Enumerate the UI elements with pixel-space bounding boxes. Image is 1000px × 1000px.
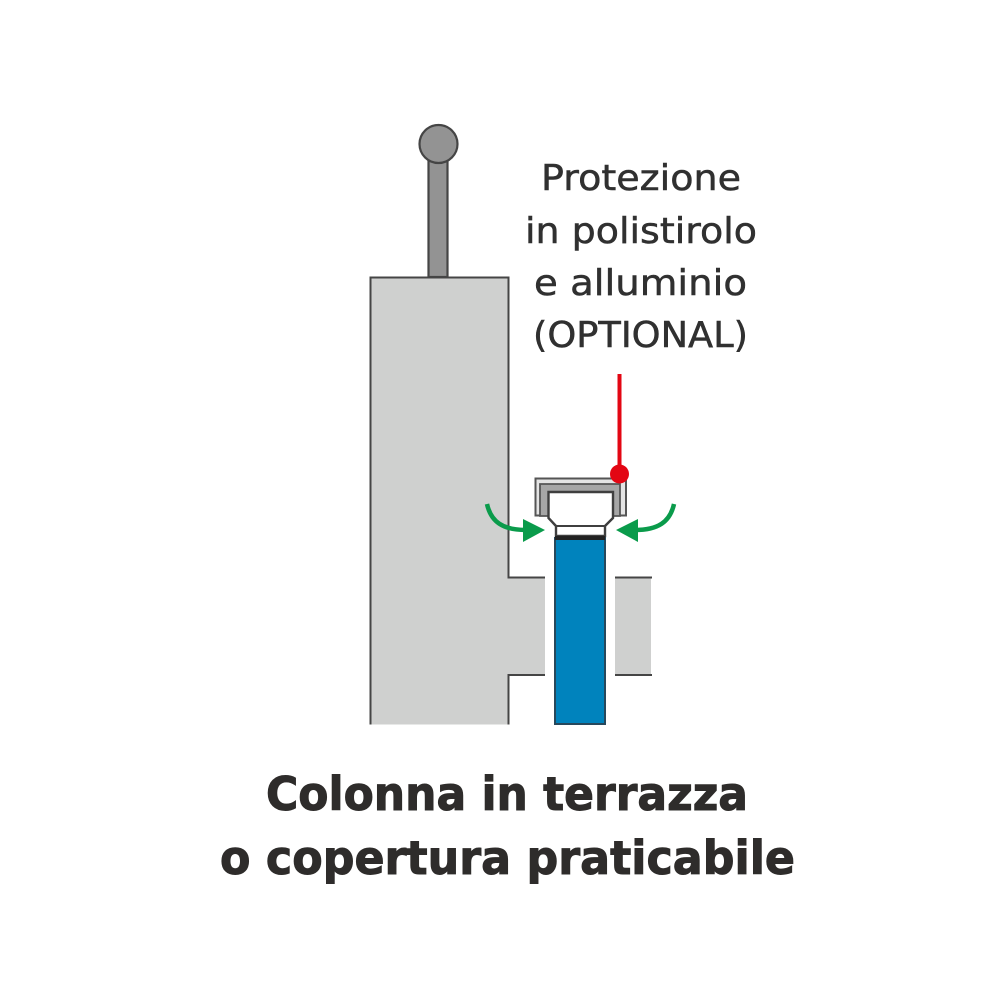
vent pipe with ball top — [420, 125, 458, 277]
callout label: protection — [525, 158, 757, 356]
callout label: protection: (OPTIONAL) — [533, 315, 748, 356]
callout label: protection: in polistirolo — [525, 211, 757, 252]
green airflow arrow left — [487, 504, 545, 542]
concrete slab right — [615, 577, 652, 675]
callout label: protection: Protezione — [541, 158, 741, 199]
title: o copertura praticabile — [220, 831, 795, 885]
title: Colonna in terrazza — [266, 767, 748, 821]
callout label: protection: e alluminio — [534, 263, 747, 304]
blue drain pipe — [555, 538, 605, 724]
title — [220, 767, 795, 885]
green airflow arrow right — [616, 504, 674, 542]
concrete column — [370, 278, 545, 724]
protection cap in polystyrene and aluminium — [536, 478, 626, 540]
red pointer line and dot — [610, 374, 629, 484]
